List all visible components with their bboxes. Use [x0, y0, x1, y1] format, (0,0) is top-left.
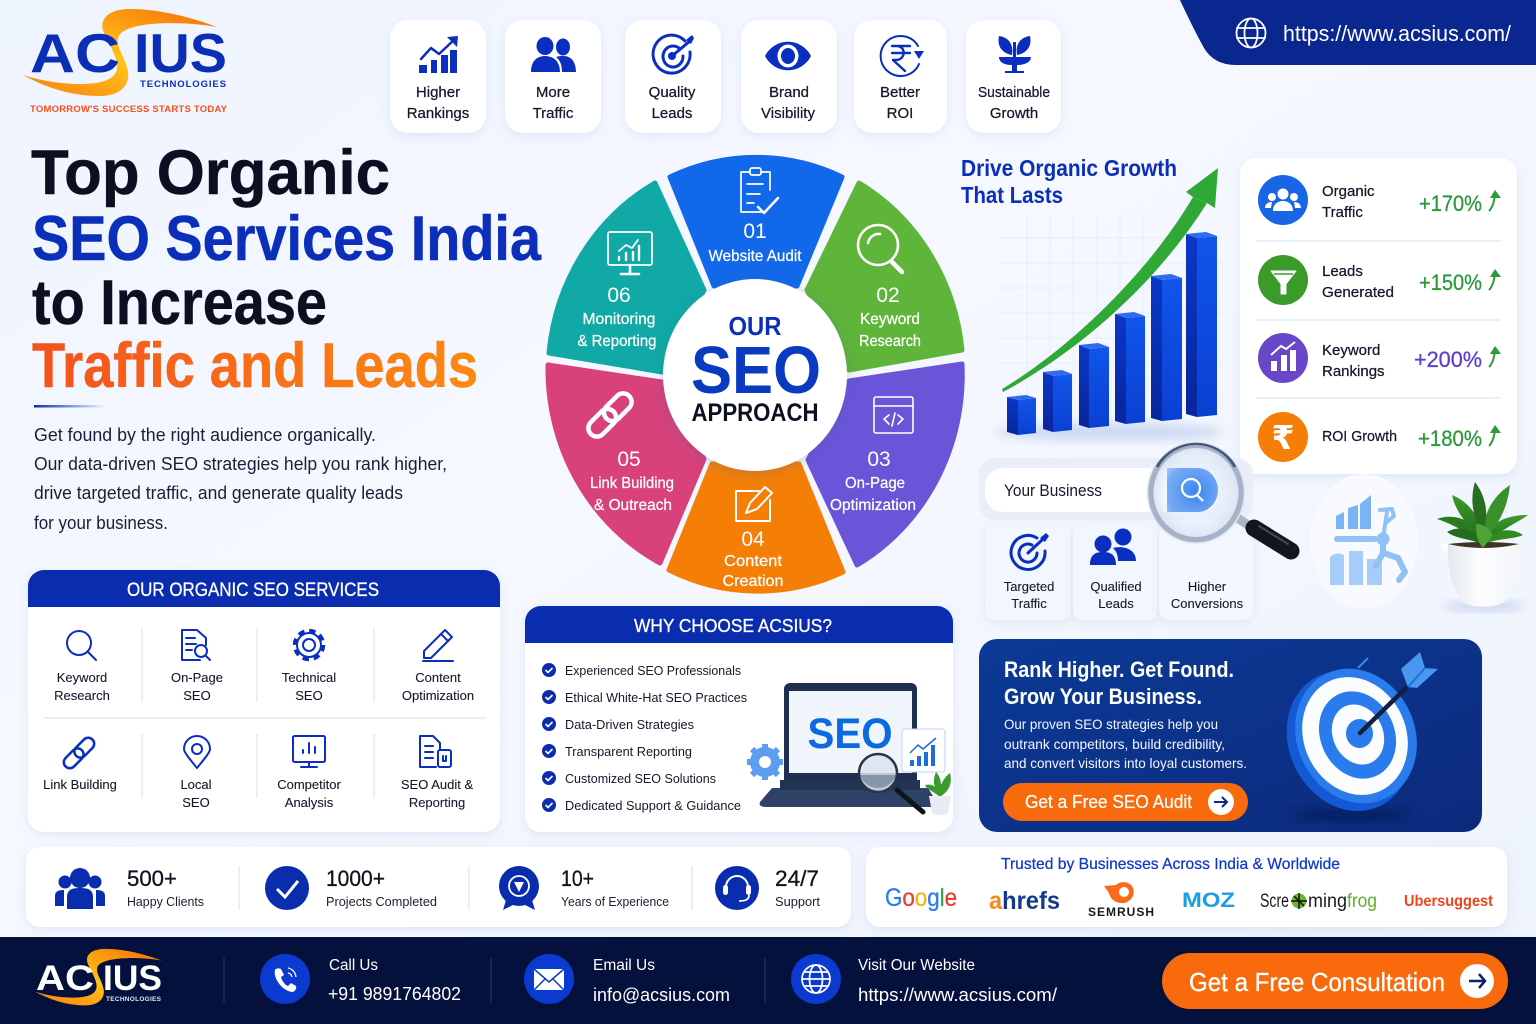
stat: Keyword Rankings: Rankings: [1322, 363, 1385, 380]
bar 6: [1186, 232, 1217, 417]
segment 01 Website Audit: Website Audit: [708, 248, 802, 265]
intro paragraph: Get found by the right audience organically.: [34, 425, 376, 445]
segment 06 Monitoring & Reporting: Monitoring: [582, 311, 656, 328]
segment 01 Website Audit: [670, 157, 842, 286]
button: free consultation: Get a Free Consultation: [1189, 967, 1445, 997]
stat: Support: 24/7: [775, 866, 819, 891]
contact: email: Email Us: [593, 957, 655, 974]
service: Keyword Research: Keyword: [57, 670, 107, 685]
card: Higher Conversions: Conversions: [1171, 596, 1244, 611]
card: Better ROI: [854, 20, 947, 133]
footer logo: AC: [36, 959, 94, 998]
stat: Leads Generated: [1258, 255, 1501, 305]
why choose header: [525, 606, 953, 643]
service: Local SEO: SEO: [182, 795, 210, 810]
decoration: potted plant: [1437, 482, 1528, 611]
card: Qualified Leads: Qualified: [1090, 579, 1142, 594]
button: free SEO audit: [1003, 783, 1248, 821]
contact: phone: [260, 954, 461, 1004]
contact: website: Visit Our Website: [858, 957, 975, 974]
bar 4: [1115, 312, 1145, 424]
search bar: [985, 468, 1218, 512]
panel: search benefits: [979, 442, 1291, 620]
card: Targeted Traffic: Traffic: [1011, 596, 1047, 611]
checklist: Transparent Reporting: [565, 744, 692, 759]
card: Qualified Leads: Leads: [1098, 596, 1134, 611]
panel: rank higher call to action: Grow Your Business.: [1004, 684, 1202, 709]
title: [31, 138, 542, 401]
panel: results stats: [1240, 158, 1517, 474]
centre circle: OUR: [728, 311, 782, 341]
stat: Keyword Rankings: +200%: [1414, 347, 1482, 372]
segment 02 Keyword Research: Keyword: [860, 311, 920, 328]
icon: lens: [859, 754, 923, 812]
contact: phone: +91 9891764802: [328, 984, 461, 1004]
footer logo: IUS: [103, 959, 162, 998]
illustration: dartboard: [1264, 649, 1439, 832]
centre circle: APPROACH: [692, 399, 818, 427]
icon: gear: [747, 744, 783, 780]
contact: website: [791, 954, 1057, 1005]
icon: chart card: [902, 729, 945, 772]
stat: Happy Clients: 500+: [127, 866, 177, 891]
logo: Acsius Technologies: IUS: [134, 22, 227, 84]
segment 05 Link Building: Link Building: [590, 475, 674, 492]
footer logo: [35, 949, 162, 1005]
segment 04 Content Creation: 04: [741, 528, 765, 551]
intro paragraph: Our data-driven SEO strategies help you rank higher,: [34, 454, 447, 474]
card: More Traffic: More: [536, 84, 570, 101]
button: free consultation: [1162, 953, 1508, 1009]
segment 02 Keyword Research: [807, 183, 962, 370]
segment 05 Link Building: [548, 365, 704, 563]
stat: Organic Traffic: [1258, 175, 1501, 225]
logo: Semrush: [1088, 882, 1154, 919]
segment 02 Keyword Research: Research: [859, 333, 921, 350]
stat: ROI Growth: [1258, 412, 1501, 462]
card: Targeted Traffic: Targeted: [1004, 579, 1054, 594]
segment 04 Content Creation: Content: [724, 553, 783, 570]
title: to Increase: [32, 268, 327, 338]
stat: ROI Growth: ₹: [1272, 419, 1294, 456]
card: Higher Conversions: Higher: [1188, 579, 1227, 594]
stat: Organic Traffic: +170%: [1419, 191, 1482, 216]
card: Higher Rankings: Rankings: [407, 105, 469, 122]
card: Higher Conversions: [1159, 524, 1253, 620]
checklist: [542, 663, 747, 813]
logo: Acsius Technologies: AC: [30, 22, 120, 84]
checklist: Experienced SEO Professionals: [565, 663, 741, 678]
contact: phone: Call Us: [329, 957, 378, 974]
stat: Leads Generated: +150%: [1419, 270, 1482, 295]
heading: Drive Organic Growth: [961, 155, 1177, 208]
logo: Screaming Frog: [1260, 891, 1377, 912]
card: More Traffic: Traffic: [533, 105, 574, 122]
services header: OUR ORGANIC SEO SERVICES: [127, 580, 379, 601]
service: Competitor Analysis: Analysis: [285, 795, 334, 810]
service: Content Optimization: Optimization: [402, 688, 474, 703]
stat: Years of Experience: Years of Experience: [561, 894, 669, 909]
card: Brand Visibility: Visibility: [761, 105, 815, 122]
footer logo: TECHNOLOGIES: [106, 996, 162, 1003]
panel: trusted by logos: Trusted by Businesses Across India & Worldwide: [1001, 856, 1340, 873]
panel: rank higher call to action: outrank competitors, build credibility,: [1004, 736, 1225, 752]
service: Content Optimization: [402, 630, 474, 703]
service: Competitor Analysis: [277, 736, 341, 810]
card: Sustainable Growth: Growth: [990, 105, 1038, 122]
card: Quality Leads: Leads: [652, 105, 692, 122]
bar 3: [1079, 343, 1109, 428]
logo: ahrefs: ahrefs: [989, 887, 1060, 915]
illustration: laptop: SEO: [808, 710, 892, 758]
checklist: Data-Driven Strategies: [565, 717, 694, 732]
logo: Acsius Technologies: TECHNOLOGIES: [140, 79, 226, 90]
service: Keyword Research: [54, 631, 110, 703]
segment 06 Monitoring & Reporting: & Reporting: [578, 333, 656, 350]
service: Competitor Analysis: Competitor: [277, 777, 341, 792]
logo: Moz: MOZ: [1182, 889, 1235, 912]
title: Top Organic: [31, 138, 390, 208]
card: Brand Visibility: Brand: [769, 84, 809, 101]
logo: Google: Google: [885, 884, 957, 912]
contact: email: info@acsius.com: [593, 985, 730, 1005]
search bar: Your Business: [1004, 481, 1102, 500]
intro paragraph: for your business.: [34, 513, 168, 533]
stat: Projects Completed: 1000+: [326, 866, 385, 891]
heading: Drive Organic Growth: That Lasts: [961, 182, 1063, 208]
growth arrow: [1002, 168, 1218, 392]
panel: rank higher call to action: Rank Higher. Get Found.: [1004, 657, 1234, 682]
service: SEO Audit & Reporting: Reporting: [409, 795, 465, 810]
website banner: [1180, 0, 1536, 65]
stat: Organic Traffic: Organic: [1322, 183, 1375, 200]
checklist: Ethical White-Hat SEO Practices: [565, 690, 747, 705]
stat: Happy Clients: [55, 866, 204, 909]
icon: small plant: [925, 772, 951, 815]
segment 03 On-Page Optimization: Optimization: [830, 497, 916, 514]
service: SEO Audit & Reporting: SEO Audit &: [401, 777, 473, 792]
card: Quality Leads: Quality: [649, 84, 696, 101]
logo: Ubersuggest: Ubersuggest: [1404, 893, 1494, 910]
service: Technical SEO: SEO: [295, 688, 323, 703]
segment 02 Keyword Research: 02: [876, 284, 900, 307]
service: Link Building: Link Building: [43, 777, 117, 792]
segment 06 Monitoring & Reporting: 06: [607, 284, 631, 307]
service: Content Optimization: Content: [415, 670, 461, 685]
intro paragraph: [34, 425, 447, 533]
heading: Drive Organic Growth: Drive Organic Growth: [961, 155, 1177, 181]
icon: globe: [1236, 18, 1266, 48]
stat: Keyword Rankings: Keyword: [1322, 342, 1380, 359]
logo: Acsius Technologies: [23, 9, 228, 115]
panel: organic SEO services: [28, 570, 500, 832]
services header: [28, 570, 500, 607]
service: SEO Audit & Reporting: [401, 736, 473, 810]
bar 5: [1151, 274, 1182, 421]
service: Technical SEO: [282, 630, 336, 703]
stat: Support: [715, 866, 820, 910]
stat: Years of Experience: [499, 866, 669, 910]
card: Sustainable Growth: Sustainable: [978, 84, 1050, 101]
why choose header: WHY CHOOSE ACSIUS?: [634, 615, 832, 636]
stat: Keyword Rankings: [1258, 333, 1501, 383]
benefit cards row: [390, 20, 1061, 133]
segment 05 Link Building: & Outreach: [594, 497, 672, 514]
card: Higher Rankings: [390, 20, 486, 133]
icon: magnifying glass: [1148, 442, 1291, 551]
service: Technical SEO: Technical: [282, 670, 336, 685]
segment 04 Content Creation: [669, 464, 843, 591]
card: Quality Leads: [625, 20, 721, 133]
stat: Support: Support: [775, 894, 820, 909]
segment 01 Website Audit: 01: [743, 220, 767, 243]
segment 04 Content Creation: Creation: [722, 573, 784, 590]
logo: Screaming Frog: Scre: [1260, 891, 1289, 912]
segment 06 Monitoring & Reporting: [549, 183, 704, 372]
stat: ROI Growth: +180%: [1418, 426, 1482, 451]
illustration: laptop: [747, 683, 951, 815]
panel: SEO approach wheel: [548, 157, 962, 591]
service: On-Page SEO: On-Page: [171, 670, 223, 685]
panel: why choose Acsius: [525, 606, 953, 832]
service: Local SEO: [180, 736, 212, 810]
checklist: Customized SEO Solutions: [565, 771, 716, 786]
panel: trusted by logos: [866, 847, 1507, 927]
stat: Leads Generated: Leads: [1322, 263, 1363, 280]
segment 03 On-Page Optimization: On-Page: [845, 475, 905, 492]
centre circle: [663, 279, 847, 471]
service: On-Page SEO: SEO: [183, 688, 211, 703]
card: Better ROI: ROI: [887, 105, 913, 122]
service: On-Page SEO: [171, 630, 223, 703]
panel: key stats bar: [26, 847, 851, 927]
panel: rank higher call to action: [979, 639, 1482, 832]
panel: rank higher call to action: Our proven SEO strategies help you: [1004, 716, 1218, 732]
card: Higher Rankings: Higher: [416, 84, 460, 101]
stat: Years of Experience: 10+: [561, 866, 594, 891]
service: Local SEO: Local: [180, 777, 212, 792]
bar 2: [1043, 370, 1072, 432]
segment 03 On-Page Optimization: 03: [867, 448, 891, 471]
segment 03 On-Page Optimization: [808, 364, 962, 565]
service: Link Building: [43, 735, 117, 792]
stat: ROI Growth: ROI Growth: [1322, 428, 1397, 445]
bar chart with growth arrow: [995, 168, 1225, 441]
website url: https://www.acsius.com/: [1283, 21, 1512, 46]
bar 1: [1007, 395, 1036, 435]
stat: Projects Completed: Projects Completed: [326, 894, 437, 909]
button: free SEO audit: Get a Free SEO Audit: [1025, 792, 1192, 812]
panel: rank higher call to action: and convert visitors into loyal customers.: [1004, 755, 1247, 771]
stat: Organic Traffic: Traffic: [1322, 204, 1363, 221]
stat: Leads Generated: Generated: [1322, 284, 1394, 301]
title: Traffic and Leads: [32, 331, 478, 401]
footer: [0, 937, 1536, 1024]
service: Keyword Research: Research: [54, 688, 110, 703]
contact: website: https://www.acsius.com/: [858, 985, 1057, 1005]
decoration: chart bubble: [1310, 474, 1418, 608]
segment 05 Link Building: 05: [617, 448, 641, 471]
card: Qualified Leads: [1073, 524, 1158, 620]
contact: email: [524, 954, 730, 1005]
card: Targeted Traffic: [985, 524, 1071, 620]
card: Better ROI: Better: [880, 84, 920, 101]
stat: Projects Completed: [265, 866, 437, 910]
card: Sustainable Growth: [966, 20, 1061, 133]
card: Brand Visibility: [741, 20, 837, 133]
card: More Traffic: [505, 20, 601, 133]
logo: Semrush: SEMRUSH: [1088, 905, 1154, 919]
stat: Happy Clients: Happy Clients: [127, 894, 204, 909]
logo: Acsius Technologies: TOMORROW'S SUCCESS STARTS TODAY: [30, 104, 228, 115]
logo: Screaming Frog: frog: [1347, 891, 1377, 912]
logo: Screaming Frog: ming: [1308, 891, 1347, 912]
centre circle: SEO: [691, 333, 821, 408]
title: SEO Services India: [32, 204, 542, 274]
checklist: Dedicated Support & Guidance: [565, 798, 741, 813]
intro paragraph: drive targeted traffic, and generate quality leads: [34, 483, 403, 503]
